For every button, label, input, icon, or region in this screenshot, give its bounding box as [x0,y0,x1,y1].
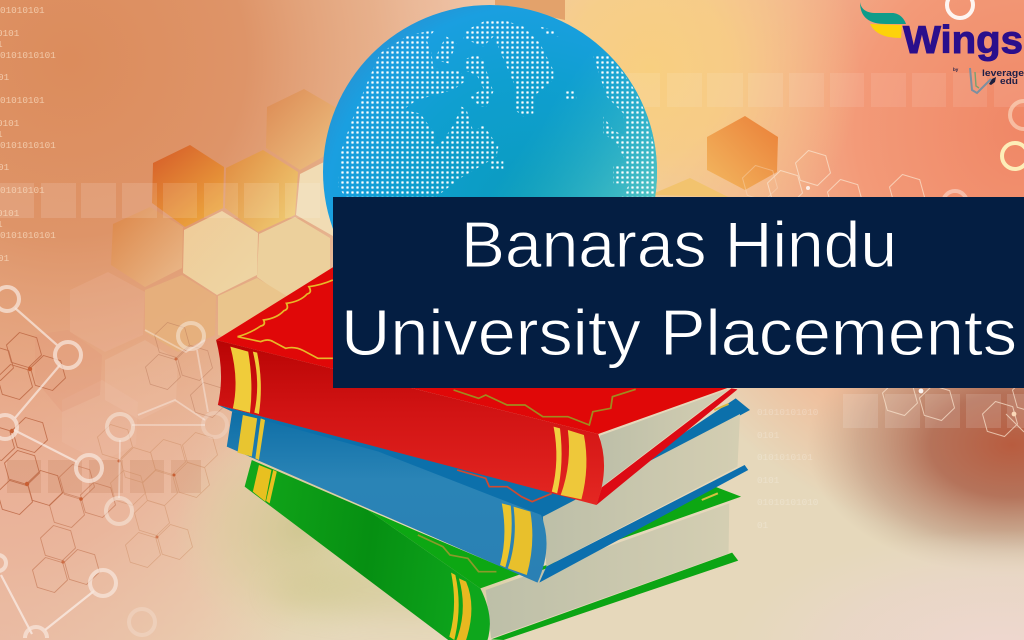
binary text left: 0101010101 [0,50,56,61]
logo byline: by [953,67,959,72]
green book [245,460,741,640]
network rings and hexagons right [742,0,1024,436]
network rings and links left [0,287,227,638]
hexagon cluster left [35,89,340,462]
binary text left: 0101010101 [0,230,56,241]
binary text right: 01010101010 [757,407,818,418]
dotted continents [338,20,655,197]
logo wordmark: Wings [903,19,1023,62]
title text [341,208,1017,369]
globe [323,5,657,229]
soft shadow under books [270,564,530,616]
leverage edu mark: leverage [982,68,1024,79]
binary text right [757,407,818,531]
binary text right: 0101 [757,475,780,486]
binary text left: 01010101 [0,95,45,106]
blue book [218,398,750,583]
red book [216,257,737,505]
leverage edu mark [970,68,1024,93]
binary text left [0,5,56,264]
translucent square strip [0,73,1024,493]
title text: University Placements [341,296,1017,369]
stack of books [216,257,750,640]
binary text right: 01 [757,520,769,531]
binary text left: 01010101 [0,5,45,16]
binary text left: 01010101 [0,185,45,196]
hexagons top centre and right [495,0,778,197]
logo swoosh [860,2,906,38]
molecular hexagon network left [0,322,226,592]
binary text right: 0101010101 [757,452,813,463]
binary text left: 0101010101 [0,140,56,151]
binary text right: 01010101010 [757,497,818,508]
binary text right: 0101 [757,430,780,441]
leverage edu mark: edu [1000,76,1018,86]
logo: Wings by leverage edu [860,2,1024,93]
title band [333,197,1024,388]
title text: Banaras Hindu [461,208,897,281]
